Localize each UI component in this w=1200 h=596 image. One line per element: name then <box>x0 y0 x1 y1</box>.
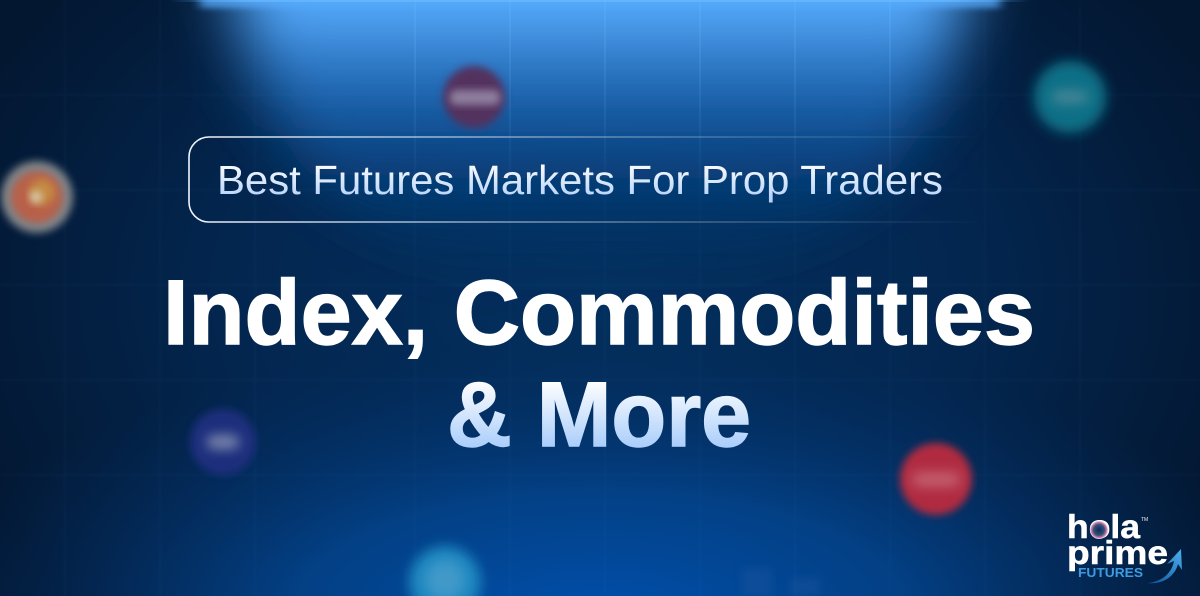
headline line one: Index, Commodities <box>163 262 1035 364</box>
logo arrow <box>1147 549 1182 583</box>
blurred icon: cyan coin bottom <box>409 546 481 596</box>
logo: hola prime futures <box>1067 508 1182 583</box>
logo: hola prime futures: hola <box>1067 508 1141 545</box>
blurred icon: faint bars bottom <box>742 568 820 596</box>
logo: hola prime futures: TM <box>1141 517 1148 523</box>
blurred icon: navy coin lower left <box>190 409 256 475</box>
blurred icon: teal coin top right <box>1034 61 1106 133</box>
subtitle text: Best Futures Markets For Prop Traders <box>217 157 943 203</box>
logo: hola prime futures: prime <box>1067 534 1168 571</box>
subtitle pill <box>189 137 989 222</box>
blurred icon: orange coin left <box>1 161 73 233</box>
logo: hola prime futures: FUTURES <box>1078 566 1143 580</box>
blurred icon: red coin lower right <box>900 443 972 515</box>
logo bubble <box>1090 521 1108 539</box>
blurred icon: maroon coin top <box>443 66 505 128</box>
headline line two: & More <box>447 364 751 466</box>
